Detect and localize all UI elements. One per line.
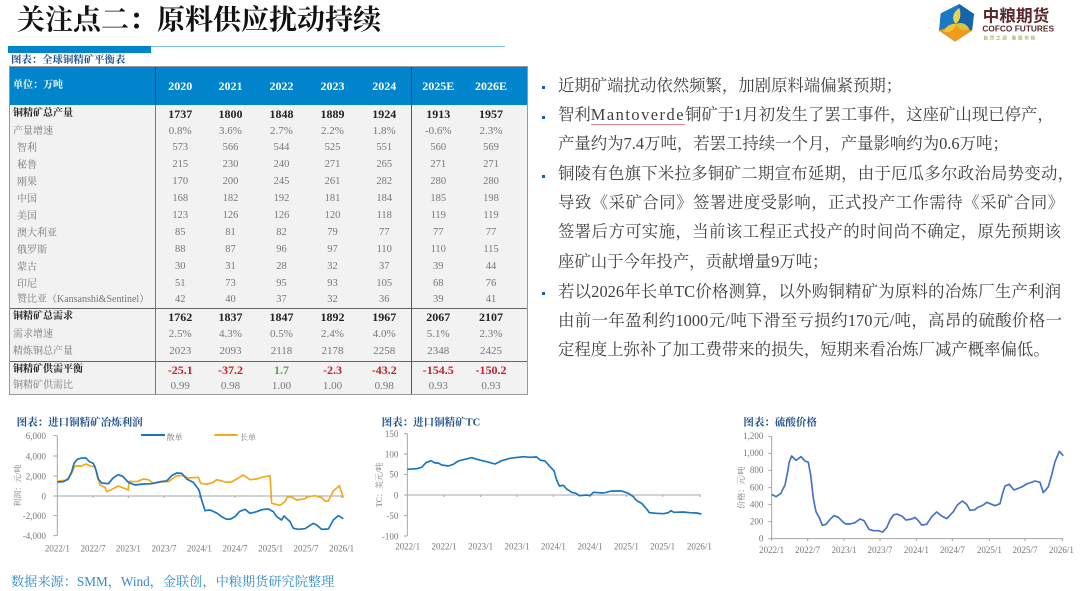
y-axis title: 利润：元/吨 [13,465,23,507]
row: supply-demand balance: 铜精矿供需平衡 [13,364,83,375]
table header row: 单位：万吨 [13,80,63,91]
row: Russia: 97 [327,244,338,255]
legend: 长单 [240,432,256,442]
table heading: 图表：全球铜精矿平衡表 [11,55,125,66]
row: Indonesia: 95 [276,278,287,289]
row: Chile: 569 [483,142,499,153]
row: Chile: 智利 [17,142,37,154]
row: USA: 120 [325,210,340,221]
x-axis labels: 2024/1 [541,542,566,552]
x-axis labels: 2023/1 [468,542,493,552]
table header row: 2024 [372,79,396,93]
row: Zambia: 39 [433,294,444,305]
x-axis labels: 2022/1 [45,543,70,553]
row: Peru: 215 [172,159,188,170]
axes [768,436,1063,541]
y-axis labels: 1,000 [743,448,764,458]
x-axis labels: 2024/1 [577,542,603,552]
row: supply-demand ratio: 1.00 [272,380,291,392]
row: Peru [17,159,499,170]
chart title: sulfuric acid: 图表：硫酸价格 [743,416,817,429]
logo: COFCO Futures: COFCO FUTURES [982,23,1054,33]
x-axis labels: 2024/1 [187,543,212,553]
row: Australia: 澳大利亚 [17,228,57,238]
row: Australia: 81 [225,227,236,238]
series: TC [407,457,701,514]
bullet list: market commentary: 智利Mantoverde铜矿于1月初发生了罢工事件，这座矿山现已停产， [558,105,1054,124]
row: supply-demand ratio: 0.98 [221,380,240,392]
row: production growth: -0.6% [425,125,452,137]
y-axis labels: 800 [750,465,764,475]
x-axis labels [395,542,712,552]
legend [141,432,256,442]
series: spot contract [57,458,343,529]
chart: copper concentrate TC [374,416,712,552]
row: demand growth: 4.3% [219,328,242,340]
row: DR Congo: 280 [483,176,499,187]
row: refined copper output: 2023 [169,345,191,357]
x-axis labels: 2025/1 [650,542,675,552]
row: Indonesia: 76 [486,278,496,289]
row: production growth: 2.2% [321,125,344,137]
y-axis labels: 150 [385,429,399,439]
bullet list: market commentary: 由前一年盈利约1000元/吨下滑至亏损约170元/吨，高昂的硫酸价格一 [558,311,1062,330]
copper concentrate balance table [10,67,527,394]
x-axis labels: 2026/1 [329,543,354,553]
y-axis labels [23,431,46,541]
row: Russia: 俄罗斯 [17,244,47,256]
x-axis labels: 2022/1 [395,542,420,552]
title rule: thin line [151,46,505,47]
bullet list: market commentary [542,76,1074,359]
row: Russia: 110 [431,244,446,255]
series: acid price [772,451,1063,532]
row: Peru: 271 [325,159,340,170]
row: refined copper output: 2118 [271,345,292,357]
bullet list: market commentary: 定程度上弥补了加工费带来的损失，短期来看冶炼厂减产概率偏低。 [558,340,1050,359]
row: Chile: 566 [223,142,238,153]
x-axis labels: 2025/7 [293,543,319,553]
title: 关注点二：原料供应扰动持续 [17,5,381,36]
title rule: thick blue bar [8,46,151,53]
row: USA: 126 [274,210,289,221]
series: long contract [57,464,343,505]
row: total production: 1737 [168,107,192,121]
row: total demand: 2107 [479,310,503,324]
row: USA: 119 [483,210,499,221]
x-axis labels: 2025/1 [977,545,1002,555]
y-axis labels: -50 [386,511,399,521]
x-axis labels: 2023/1 [831,545,857,555]
row: Australia: 77 [379,227,390,238]
row: demand growth: 0.5% [270,328,293,340]
row: refined copper output: 2178 [322,345,344,357]
row: Mongolia: 32 [327,261,338,272]
table header row [10,67,527,105]
row: Mongolia: 28 [276,261,287,272]
row: Chile: 560 [430,142,446,153]
row: Chile: 573 [172,142,188,153]
row: Australia: 77 [433,227,444,238]
row: Mongolia [17,261,496,272]
row: DR Congo: 200 [223,176,238,187]
x-axis labels: 2025/7 [1012,545,1038,555]
row: Zambia: 41 [486,294,496,305]
row: demand growth [13,328,502,340]
y-axis labels: 200 [750,516,764,526]
row: China: 192 [274,193,289,204]
row: total production: 1957 [479,107,503,121]
row: Russia: 96 [276,244,287,255]
row: Indonesia: 51 [175,278,186,289]
y-axis title: 价格：元/吨 [736,467,746,509]
row: supply-demand ratio: 0.93 [481,380,501,392]
row: Russia: 115 [483,244,499,255]
row: Zambia: 37 [276,294,287,305]
x-axis labels: 2024/7 [222,543,248,553]
row: DR Congo: 245 [274,176,289,187]
row: Mongolia: 蒙古 [17,262,37,272]
y-axis labels: 6,000 [26,431,46,441]
x-axis labels: 2023/7 [867,545,893,555]
x-axis labels: 2024/1 [904,545,929,555]
row: production growth [13,125,502,137]
row: Mongolia: 37 [379,261,390,272]
row: total demand: 1967 [372,310,396,324]
row: production growth: 2.3% [480,125,502,137]
row: Zambia: 36 [379,294,390,305]
row: Chile: 525 [325,142,340,153]
row: Mongolia: 31 [225,261,236,272]
row: Zambia: 赞比亚（Kansanshi&Sentinel） [17,294,149,305]
row: total demand: 1762 [168,310,192,324]
row: Australia: 82 [276,227,287,238]
row: DR Congo: 170 [172,176,188,187]
row: production growth: 0.8% [169,125,192,137]
row: DR Congo: 261 [325,176,340,187]
row: total production: 1924 [372,107,396,121]
table header row: 2023 [320,79,344,93]
x-axis labels: 2022/1 [431,542,457,552]
y-axis labels: -4,000 [23,531,46,541]
table header row: 2021 [218,79,242,93]
y-axis title: TC：美元/吨 [374,463,384,507]
row: supply-demand balance: -150.2 [476,363,506,377]
x-axis labels: 2023/1 [504,542,530,552]
table header row: 2022 [270,79,294,93]
row: Peru: 240 [274,159,289,170]
row: total demand: 铜精矿总需求 [13,311,73,322]
x-axis labels: 2022/7 [795,545,821,555]
row: production growth: 3.6% [219,125,242,137]
row: Chile: 551 [376,142,392,153]
row: refined copper output: 2348 [427,345,449,357]
x-axis labels: 2025/1 [258,543,283,553]
row: supply-demand ratio: 0.93 [429,380,448,392]
row: Russia: 87 [225,244,236,255]
row: USA [17,210,499,222]
y-axis labels: 1,200 [743,431,764,441]
row: total demand: 1837 [218,310,242,324]
bullet list: market commentary: 签署后方可实施，当前该工程正式投产的时间尚不确定，原先预期该 [558,222,1061,241]
row: production growth: 2.7% [270,125,293,137]
row: supply-demand balance: 1.7 [274,363,289,377]
row: Peru: 271 [483,159,499,170]
row: Chile [17,142,499,154]
y-axis labels [743,431,764,543]
chart title: TC: 图表：进口铜精矿TC [382,416,480,429]
row: Australia: 77 [486,227,496,238]
row: supply-demand ratio: 1.00 [323,380,342,392]
row: Mongolia: 30 [175,261,186,272]
chart title: smelting profit: 图表：进口铜精矿冶炼利润 [17,416,143,429]
logo: COFCO Futures: 自然之源 重塑你我 [983,35,1037,42]
row: supply-demand balance: -2.3 [323,363,342,377]
row: China: 185 [430,193,446,204]
data source note: 数据来源：SMM，Wind，金联创，中粮期货研究院整理 [11,574,334,589]
row: China: 182 [223,193,238,204]
row: Australia: 85 [175,227,186,238]
chart: sulfuric acid price [736,416,1074,555]
y-axis labels: 0 [394,490,399,500]
y-axis labels: 400 [750,499,764,509]
row: Indonesia: 93 [327,278,338,289]
row: China: 中国 [17,194,37,204]
logo: COFCO Futures: 中粮期货 [983,5,1050,25]
row: USA: 美国 [17,210,37,222]
row: Indonesia: 105 [376,278,392,289]
row: refined copper output [13,345,502,357]
row: production growth: 产量增速 [13,126,53,136]
row: refined copper output: 2093 [220,345,242,357]
logo: COFCO Futures [939,4,1054,42]
y-axis labels: 2,000 [26,471,46,481]
y-axis labels: 50 [389,470,399,480]
row: Zambia: 42 [175,294,186,305]
y-axis labels: 0 [42,491,46,501]
row: DR Congo: 282 [376,176,392,187]
axes [53,436,343,536]
row: refined copper output: 2258 [373,345,395,357]
row: total production [13,107,503,121]
row: supply-demand balance: -43.2 [372,363,397,377]
row: total production: 1889 [320,107,344,121]
row: China [17,193,499,204]
row: production growth: 1.8% [373,125,396,137]
x-axis labels [759,545,1074,555]
y-axis labels: 0 [759,533,764,543]
row: Australia: 79 [327,227,338,238]
y-axis labels: -2,000 [23,511,46,521]
y-axis labels: -100 [382,531,399,541]
row: Zambia: 32 [327,294,338,305]
row: total demand: 2067 [426,310,450,324]
row: supply-demand ratio: 0.99 [171,380,190,392]
row: Zambia [17,293,496,305]
row: Peru: 230 [223,159,238,170]
row: China: 168 [172,193,188,204]
row: demand growth: 5.1% [427,328,450,340]
row: Indonesia: 印尼 [17,278,37,290]
bullet list: market commentary: 若以2026年长单TC价格测算，以外购铜精矿为原料的冶炼厂生产利润 [558,282,1061,301]
row: Russia: 110 [377,244,392,255]
row: total demand [13,310,503,324]
x-axis labels: 2022/7 [80,543,106,553]
y-axis labels [382,429,399,541]
bullet list: market commentary: 产量约为7.4万吨，若罢工持续一个月，产量影响约为0.6万吨； [558,134,1009,153]
row: China: 181 [325,193,340,204]
table header row: 2025E [422,79,454,93]
row: total production: 1800 [218,107,242,121]
row: demand growth: 2.4% [321,328,344,340]
y-axis labels: 600 [750,482,764,492]
row: Indonesia [17,278,496,290]
table header row: 2026E [475,79,507,93]
row: Chile: 544 [274,142,289,153]
row: supply-demand ratio: 0.98 [375,380,394,392]
row: demand growth: 2.5% [169,328,192,340]
row: supply-demand balance: -37.2 [218,363,243,377]
x-axis labels: 2023/1 [116,543,141,553]
row: demand growth: 2.3% [480,328,502,340]
table header row: 2020 [168,79,192,93]
row: USA: 119 [431,210,446,221]
row: DR Congo: 刚果 [17,176,37,188]
row: supply-demand balance: -154.5 [423,363,454,377]
row: Mongolia: 39 [433,261,444,272]
row: total production: 1913 [426,107,450,121]
row: demand growth: 4.0% [373,328,396,340]
x-axis labels: 2026/1 [687,542,712,552]
row: Zambia: 40 [225,294,236,305]
row: Indonesia: 73 [225,278,236,289]
bullet list: market commentary: 近期矿端扰动依然频繁，加剧原料端偏紧预期； [558,76,902,95]
row: refined copper output: 2425 [480,345,502,357]
row: supply-demand balance [13,363,506,377]
x-axis labels: 2026/1 [1049,545,1074,555]
bullet list: market commentary: 导致《采矿合同》签署进度受影响，正式投产工作需待《采矿合同》 [558,193,1064,212]
row: USA: 118 [377,210,392,221]
row: Indonesia: 68 [433,278,444,289]
row: USA: 123 [172,210,188,221]
x-axis labels [45,543,354,553]
row: DR Congo [17,176,499,188]
row: supply-demand ratio [13,379,501,392]
row: Peru: 265 [376,159,392,170]
row: supply-demand balance: -25.1 [168,363,193,377]
row: China: 184 [376,193,392,204]
row: DR Congo: 280 [430,176,446,187]
y-axis labels: 100 [385,449,399,459]
row: total demand: 1892 [320,310,344,324]
row: Russia: 88 [175,244,186,255]
bullet list: market commentary: 座矿山于今年投产，贡献增量9万吨； [558,252,828,271]
x-axis labels: 2024/7 [940,545,965,555]
row: total production: 铜精矿总产量 [13,108,73,119]
row: refined copper output: 精炼铜总产量 [13,346,73,357]
axes [404,434,701,536]
row: Peru: 271 [430,159,446,170]
row: Peru: 秘鲁 [17,160,37,170]
row: Mongolia: 44 [486,261,496,272]
x-axis labels: 2023/7 [151,543,177,553]
bullet list: market commentary: 铜陵有色旗下米拉多铜矿二期宣布延期，由于厄瓜多尔政治局势变动， [558,164,1074,183]
row: total demand: 1847 [270,310,294,324]
row: Russia [17,244,499,256]
row: total production: 1848 [270,107,294,121]
row: demand growth: 需求增速 [13,328,53,340]
row: Australia [17,227,496,238]
chart: smelting profit [13,416,354,553]
y-axis labels: 4,000 [26,451,46,461]
x-axis labels: 2025/1 [614,542,639,552]
legend: 散单 [167,432,183,442]
row: China: 198 [483,193,499,204]
x-axis labels: 2022/1 [759,545,784,555]
row: USA: 126 [223,210,238,221]
row: supply-demand ratio: 铜精矿供需比 [13,380,73,391]
